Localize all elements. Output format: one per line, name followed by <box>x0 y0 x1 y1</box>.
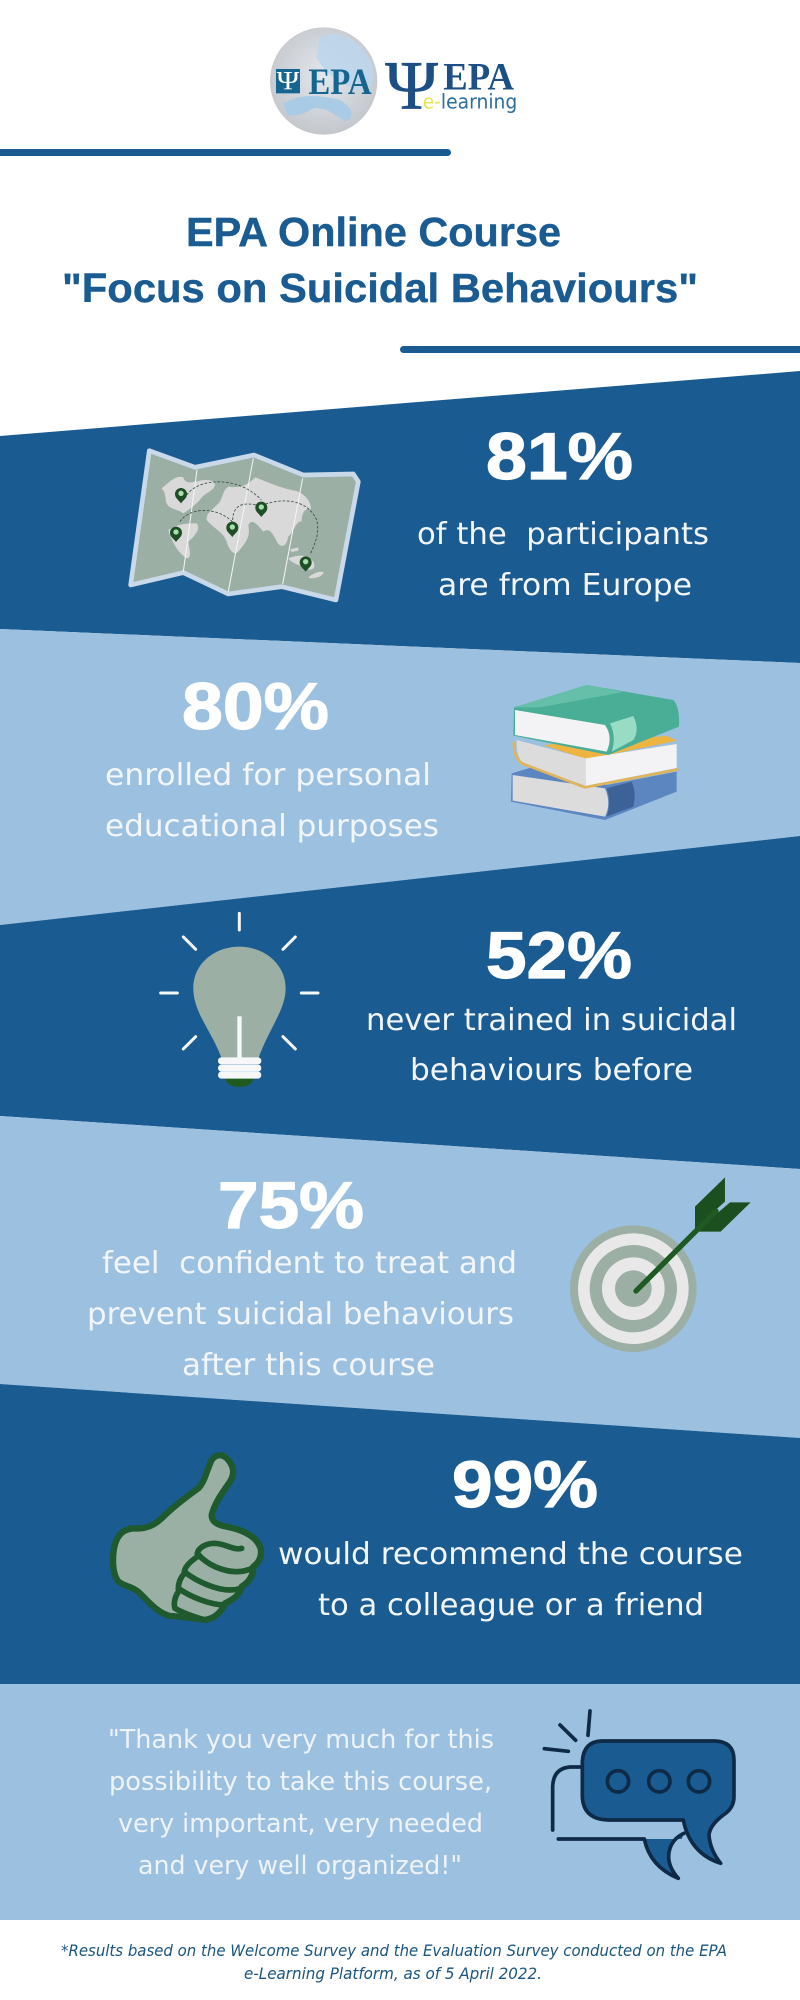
text: confident: prevent suicidal behaviours <box>87 1297 514 1332</box>
icon: light bulb <box>161 913 318 1087</box>
stat: 81%: 81% <box>486 419 633 493</box>
logo: EPA e-learning <box>385 47 517 123</box>
logo: EPA globe: Ψ <box>277 66 300 95</box>
stat: 75%: 75% <box>218 1168 364 1242</box>
text: recommend: would recommend the course <box>278 1537 743 1572</box>
text: never trained: never trained in suicidal <box>366 1003 737 1038</box>
text: never trained: behaviours before <box>410 1053 693 1088</box>
text: enrolled <box>105 758 439 844</box>
stat: 52%: 52% <box>486 918 632 992</box>
icon: thumbs up <box>113 1455 261 1620</box>
text: recommend: to a colleague or a friend <box>318 1588 704 1623</box>
text: confident: feel confident to treat and <box>102 1246 517 1281</box>
icon: target with arrow <box>570 1177 751 1352</box>
logo: EPA e-learning: Ψ <box>385 47 439 123</box>
text: participants <box>417 517 709 603</box>
icon: speech bubbles <box>544 1711 734 1878</box>
text: quote <box>108 1725 494 1881</box>
top divider line <box>0 149 451 156</box>
panel: 81% Europe <box>0 371 800 663</box>
footnote: *Results based on the Welcome Survey and the Evaluation Survey conducted on the EPA <box>61 1941 727 1960</box>
title: EPA Online Course <box>186 209 561 255</box>
footnote <box>61 1941 727 1983</box>
stat: 80%: 80% <box>182 669 329 743</box>
icon: stack of books <box>511 685 679 820</box>
text: never trained <box>366 1003 737 1088</box>
text: participants: are from Europe <box>438 568 692 603</box>
title <box>62 209 698 311</box>
text: quote: "Thank you very much for this <box>108 1725 494 1755</box>
text: quote: and very well organized!" <box>138 1851 462 1881</box>
panel: participant quote <box>0 1684 800 1920</box>
panel: 75% confident <box>0 1116 800 1438</box>
footnote: e-Learning Platform, as of 5 April 2022. <box>244 1964 542 1983</box>
text: enrolled: enrolled for personal <box>105 758 431 793</box>
text: participants: of the participants <box>417 517 709 552</box>
logo: EPA e-learning: EPA <box>443 54 515 98</box>
header: EPA logos <box>270 27 517 135</box>
logo: EPA globe: EPA <box>308 62 372 103</box>
lower title divider line <box>400 346 800 353</box>
panel: 99% recommend <box>0 1384 800 1684</box>
text: quote: possibility to take this course, <box>109 1767 492 1797</box>
text: confident <box>87 1246 517 1383</box>
text: recommend <box>278 1537 743 1623</box>
text: enrolled: educational purposes <box>105 809 439 844</box>
icon: world map <box>131 451 358 600</box>
panel: 52% never trained <box>0 836 800 1169</box>
title: "Focus on Suicidal Behaviours" <box>62 265 698 311</box>
logo: EPA e-learning: e-learning <box>423 89 517 113</box>
stat: 99%: 99% <box>452 1447 598 1521</box>
text: quote: very important, very needed <box>118 1809 483 1839</box>
panel: 80% personal purposes <box>0 629 800 925</box>
logo: EPA globe <box>270 27 377 135</box>
text: confident: after this course <box>182 1348 435 1383</box>
